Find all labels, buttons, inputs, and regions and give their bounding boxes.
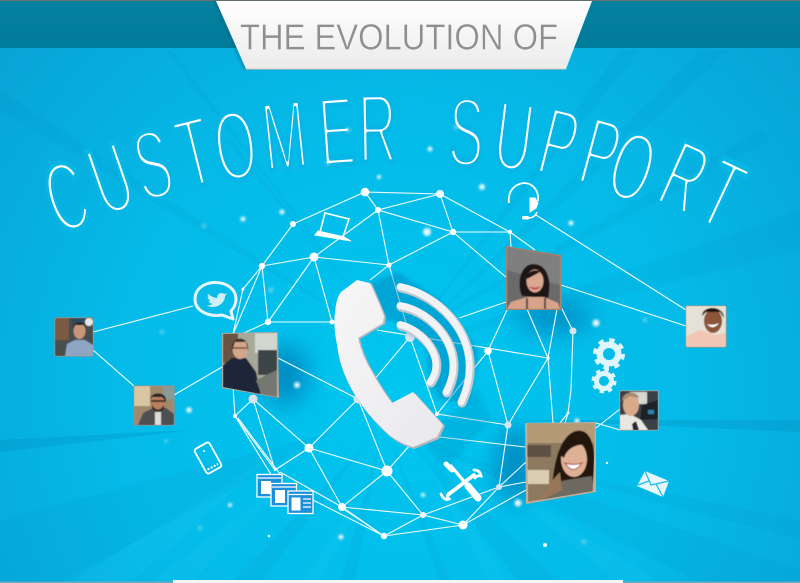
handset edge — [335, 281, 445, 449]
photo: man in blue shirt — [54, 318, 94, 356]
main title: customer support: T — [166, 95, 224, 209]
main title: customer support: O — [596, 109, 669, 225]
icon: twitter speech bubble — [195, 282, 236, 319]
twitter bird — [207, 293, 227, 307]
main title: customer support: R — [645, 120, 724, 235]
signal waves — [400, 286, 470, 403]
sparkle dots — [160, 124, 648, 547]
photo: smiling man in dark sweater — [222, 332, 279, 400]
photo: laughing woman — [525, 422, 596, 504]
banner title: THE EVOLUTION OF — [240, 16, 558, 58]
icon: wrench and screwdriver — [441, 464, 481, 499]
main title: customer support: P — [529, 86, 589, 201]
network globe — [93, 188, 686, 539]
main title: customer support: O — [207, 89, 263, 203]
main title: customer support: R — [357, 73, 397, 183]
icon: gears — [593, 340, 623, 392]
main title: customer support: P — [569, 96, 632, 211]
main title: customer support — [32, 73, 760, 255]
main title: customer support: M — [257, 79, 312, 192]
icon: telephone handset with signal waves — [334, 272, 492, 470]
icon: envelope — [637, 471, 669, 497]
handset long shadow — [370, 272, 492, 470]
main title: customer support: E — [315, 76, 358, 187]
main title: customer support: S — [124, 108, 182, 222]
main title: customer support: T — [684, 138, 760, 251]
icon: smartphone — [194, 442, 222, 474]
icon: headset — [509, 183, 538, 220]
main title: customer support: U — [488, 80, 540, 193]
photo: woman with dark hair — [506, 246, 562, 310]
icon: browser windows — [257, 474, 313, 514]
photo shadows — [261, 304, 593, 503]
photo: smiling man in pink shirt — [686, 306, 726, 348]
bottom edge — [0, 580, 800, 583]
handset — [334, 280, 443, 447]
header band — [0, 0, 800, 48]
main title: customer support: S — [447, 77, 486, 188]
icon: laptop — [315, 213, 351, 241]
network nodes — [233, 188, 576, 539]
banner — [213, 1, 592, 69]
photo: man with glasses — [134, 386, 174, 426]
main title: customer support: C — [32, 139, 100, 255]
photo: man in pilot uniform — [620, 390, 658, 430]
main title: customer support: U — [75, 121, 147, 237]
